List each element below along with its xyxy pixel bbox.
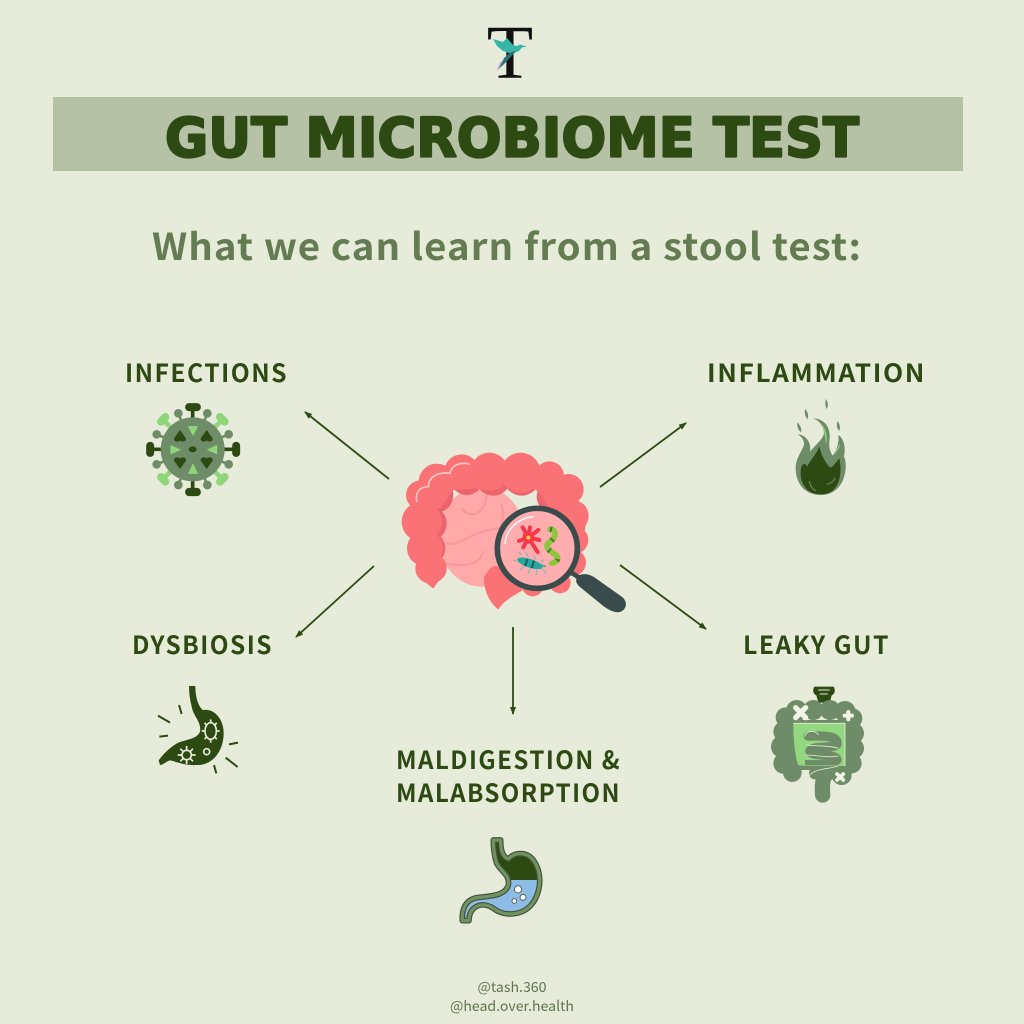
footer handles: @head.over.health bbox=[450, 996, 574, 1016]
colon highlight bbox=[416, 463, 469, 502]
arrow: to infections bbox=[305, 412, 389, 479]
label: infections: INFECTIONS bbox=[125, 354, 288, 390]
red microbe bbox=[519, 527, 539, 552]
icon: stomach with microbes bbox=[158, 686, 238, 773]
colon shade bbox=[410, 459, 570, 582]
label: leaky gut: LEAKY GUT bbox=[743, 626, 890, 662]
teal bug bbox=[513, 552, 546, 575]
green worm bbox=[547, 529, 558, 563]
label: maldigestion and malabsorption: MALABSORPTION bbox=[396, 774, 621, 810]
logo: T with hummingbird: T bbox=[487, 11, 533, 95]
arrow: to maldigestion bbox=[512, 627, 514, 714]
central illustration: colon with magnifying glass bbox=[402, 453, 626, 612]
title banner: GUT MICROBIOME TEST bbox=[165, 106, 859, 170]
icon: virus bbox=[148, 405, 238, 494]
arrow: to leaky gut bbox=[620, 565, 706, 629]
footer handles bbox=[450, 977, 574, 1016]
label: inflammation: INFLAMMATION bbox=[707, 354, 926, 390]
label: dysbiosis: DYSBIOSIS bbox=[132, 626, 273, 662]
magnifier handle bbox=[572, 573, 626, 612]
icon: leaky colon bbox=[771, 687, 864, 795]
footer handles: @tash.360 bbox=[478, 977, 547, 997]
title banner bbox=[53, 97, 963, 171]
colon body bbox=[438, 487, 525, 587]
label: maldigestion and malabsorption: MALDIGESTION & bbox=[396, 741, 621, 777]
label: maldigestion and malabsorption bbox=[396, 741, 621, 810]
arrow: to inflammation bbox=[600, 423, 686, 487]
magnifier lens with microbes bbox=[497, 508, 577, 588]
arrow: to dysbiosis bbox=[296, 566, 374, 637]
colon scallops bbox=[402, 453, 589, 609]
icon: stomach with fluid bbox=[462, 840, 540, 921]
icon: flame bbox=[796, 399, 846, 495]
subtitle: What we can learn from a stool test: bbox=[152, 217, 862, 271]
